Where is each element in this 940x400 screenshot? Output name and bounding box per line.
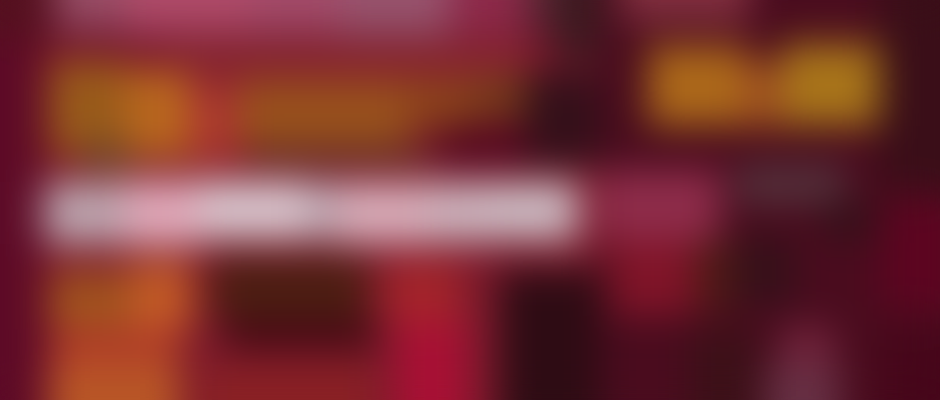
heading stat: amber figure — [50, 62, 238, 170]
amber stat bridge — [745, 62, 785, 128]
lower centre red column — [385, 262, 467, 400]
header band — [0, 0, 600, 60]
dark separator — [500, 270, 600, 400]
left panel background — [40, 40, 600, 400]
heading text bar — [170, 45, 535, 166]
lower left orange blocks — [50, 262, 192, 400]
dark corner block — [440, 72, 600, 166]
amber stat box left — [648, 46, 748, 126]
top right strip — [620, 0, 750, 22]
pale banner — [44, 180, 578, 246]
right panel background — [600, 0, 940, 400]
lower centre dark block — [200, 258, 375, 400]
right column blocks — [600, 0, 940, 400]
amber stat box right — [782, 44, 882, 126]
